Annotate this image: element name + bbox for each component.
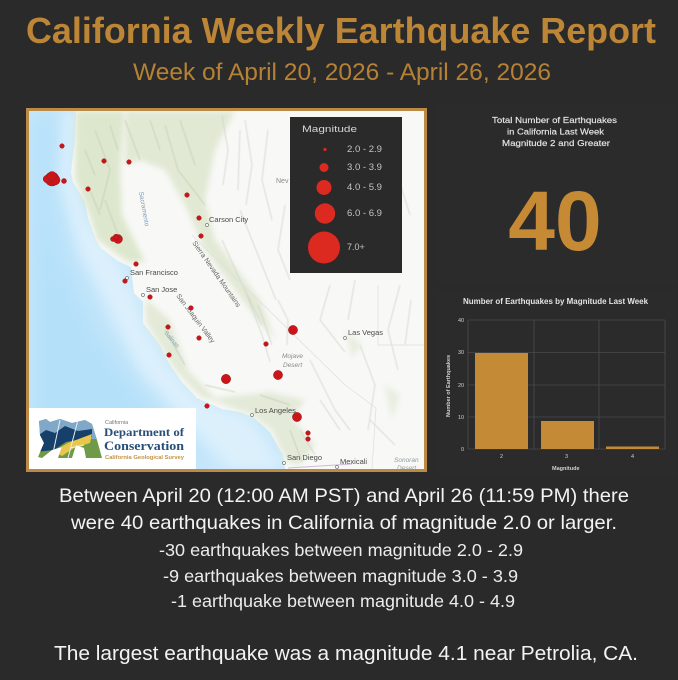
logo: Department of Conservation: Department of: [104, 425, 185, 439]
big number: 40: [508, 174, 602, 268]
axis labels: Magnitude: [552, 466, 580, 472]
icon: bear: [38, 419, 102, 458]
axis labels: 3: [565, 454, 568, 460]
border line at Mexico: [288, 464, 352, 468]
summary text: -9 earthquakes between magnitude 3.0 - 3.9: [163, 566, 518, 586]
map place labels: [130, 178, 419, 472]
summary text: were 40 earthquakes in California of magnitude 2.0 or larger.: [70, 512, 617, 534]
panel: earthquake map: [28, 110, 426, 472]
panel: total count: Magnitude 2 and Greater: [502, 138, 610, 148]
land: [71, 111, 424, 469]
map place labels: Sacramento: [137, 191, 150, 227]
map legend: magnitude: [290, 117, 402, 273]
axis labels: 4: [631, 454, 634, 460]
summary text: Between April 20 (12:00 AM PST) and April 26 (11:59 PM) there: [59, 485, 629, 507]
title: California Weekly Earthquake Report: [26, 10, 656, 51]
map place labels: Carson City: [209, 215, 248, 224]
logo: Department of Conservation: Conservation: [104, 438, 185, 453]
axis labels: 30: [458, 350, 464, 356]
map place labels: Los Angeles: [255, 406, 296, 415]
logo: Department of Conservation: California Geological Survey: [105, 455, 185, 461]
summary text: [54, 485, 638, 665]
axis labels: 0: [461, 447, 464, 453]
axis labels: [446, 318, 634, 472]
bars: [475, 353, 659, 449]
earthquake points: [43, 144, 310, 441]
map legend: magnitude: 6.0 - 6.9: [347, 208, 382, 218]
map legend: magnitude: 3.0 - 3.9: [347, 162, 382, 172]
roads and borders: [192, 235, 424, 469]
map place labels: Mexicali: [340, 457, 367, 466]
map place labels: San Jose: [146, 285, 177, 294]
axis labels: Number of Earthquakes: [446, 355, 452, 417]
map legend: magnitude: 7.0+: [347, 242, 365, 252]
summary text: -30 earthquakes between magnitude 2.0 - 2.9: [159, 540, 523, 560]
terrain relief: [85, 115, 411, 462]
logo: Department of Conservation: [29, 408, 196, 469]
map place labels: Desert: [283, 362, 303, 369]
map place labels: San Francisco: [130, 268, 178, 277]
panel: bar chart: [438, 290, 677, 477]
panel: total count: Total Number of Earthquakes: [492, 115, 617, 125]
axis labels: 2: [500, 454, 503, 460]
subtitle: Week of April 20, 2026 - April 26, 2026: [133, 59, 551, 86]
summary text: The largest earthquake was a magnitude 4.1 near Petrolia, CA.: [54, 643, 638, 665]
summary text: -1 earthquake between magnitude 4.0 - 4.9: [171, 591, 515, 611]
map legend: magnitude: 2.0 - 2.9: [347, 144, 382, 154]
map place labels: Las Vegas: [348, 328, 383, 337]
map place labels: Salinas: [162, 330, 180, 349]
ocean: [29, 111, 289, 469]
map place labels: Sonoran: [394, 457, 419, 464]
map place labels: San Diego: [287, 453, 322, 462]
panel: bar chart: Number of Earthquakes by Magnitude Last Week: [463, 297, 649, 306]
map place labels: Sierra Nevada Mountains: [190, 240, 242, 309]
panel: total count: [438, 103, 677, 285]
logo: Department of Conservation: California: [105, 420, 129, 426]
axis labels: 10: [458, 415, 464, 421]
map place labels: Nev: [276, 178, 289, 185]
city markers: [126, 224, 346, 468]
map legend: magnitude: 4.0 - 5.9: [347, 182, 382, 192]
axis labels: 40: [458, 318, 464, 324]
map place labels: San Joaquin Valley: [174, 293, 216, 345]
axis labels: 20: [458, 383, 464, 389]
map place labels: Desert: [397, 465, 417, 472]
map legend: magnitude: Magnitude: [302, 124, 357, 135]
panel: total count: in California Last Week: [507, 126, 605, 136]
map place labels: Mojave: [282, 353, 303, 360]
